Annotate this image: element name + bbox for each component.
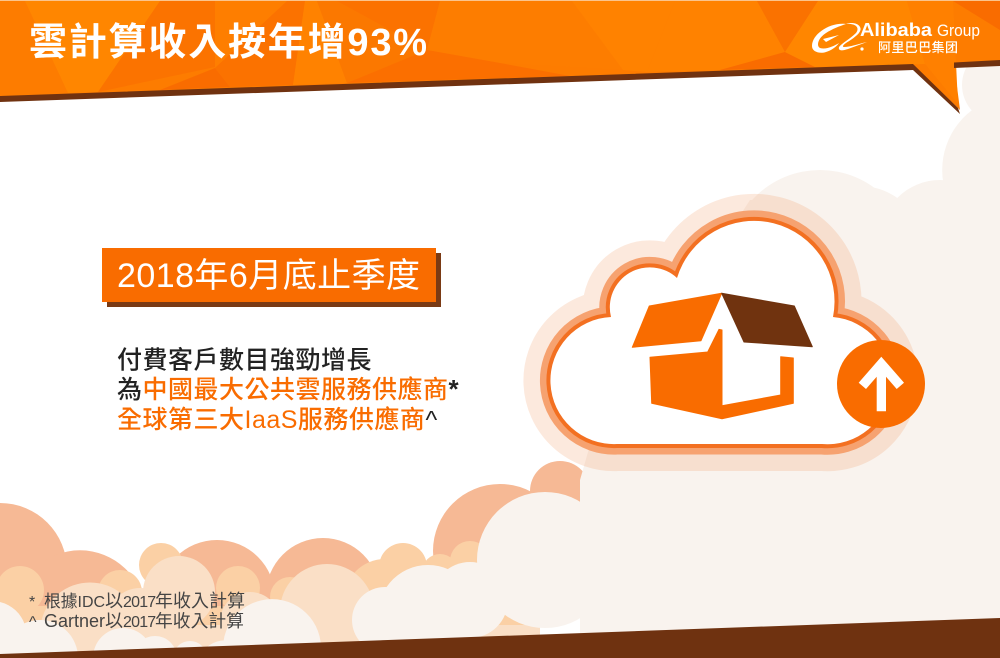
bottom brown band bbox=[0, 618, 1000, 658]
footnotes bbox=[29, 591, 245, 631]
logo word Group: Group bbox=[937, 21, 980, 40]
logo swoosh bbox=[812, 23, 867, 53]
logo Chinese name: 阿里巴巴集团 bbox=[878, 40, 958, 55]
period label box bbox=[102, 248, 441, 307]
period label text: 2018年6月底止季度 bbox=[117, 257, 420, 295]
cloud halo bbox=[550, 221, 891, 444]
footnote 2 text: 2017 bbox=[123, 614, 156, 631]
logo: Alibaba Group bbox=[812, 20, 980, 55]
line 3: 全球第三大IaaS服務供應商^ bbox=[117, 405, 438, 434]
background clouds: salmon layer bbox=[0, 461, 590, 658]
footnote 1 text: 2017 bbox=[123, 594, 156, 611]
growth arrow badge bbox=[837, 340, 925, 428]
box right flap bbox=[722, 293, 812, 347]
footnote 2 text: 年收入計算 bbox=[155, 611, 244, 631]
body text bbox=[117, 346, 460, 434]
cloud icon with box bbox=[550, 221, 891, 444]
footnote 1 text: IDC bbox=[78, 594, 105, 611]
logo wordmark: Alibaba bbox=[860, 20, 933, 40]
footnote 1 text: 年收入計算 bbox=[155, 591, 245, 611]
line 2: 為中國最大公共雲服務供應商* bbox=[117, 374, 460, 404]
box body bbox=[650, 329, 793, 419]
brown stripe under banner bbox=[0, 64, 960, 114]
box left flap bbox=[632, 293, 722, 347]
footnote 2 text: Gartner bbox=[44, 611, 105, 631]
footnote 2 text: 以 bbox=[105, 611, 123, 631]
header banner bbox=[0, 0, 1000, 114]
footnote 1 text: 以 bbox=[105, 591, 123, 611]
title: 雲計算收入按年增93% bbox=[29, 22, 429, 64]
background clouds: light peach layer bbox=[0, 556, 540, 658]
footnote 1 text: 根據 bbox=[44, 592, 78, 611]
cloud ring bbox=[550, 221, 891, 444]
cloud outline bbox=[550, 221, 891, 444]
background clouds: peach layer bbox=[0, 541, 540, 658]
footnote 1 marker: * bbox=[29, 594, 35, 611]
footnote 2 marker: ^ bbox=[29, 614, 37, 631]
line 1: 付費客戶數目強勁增長 bbox=[117, 346, 372, 374]
